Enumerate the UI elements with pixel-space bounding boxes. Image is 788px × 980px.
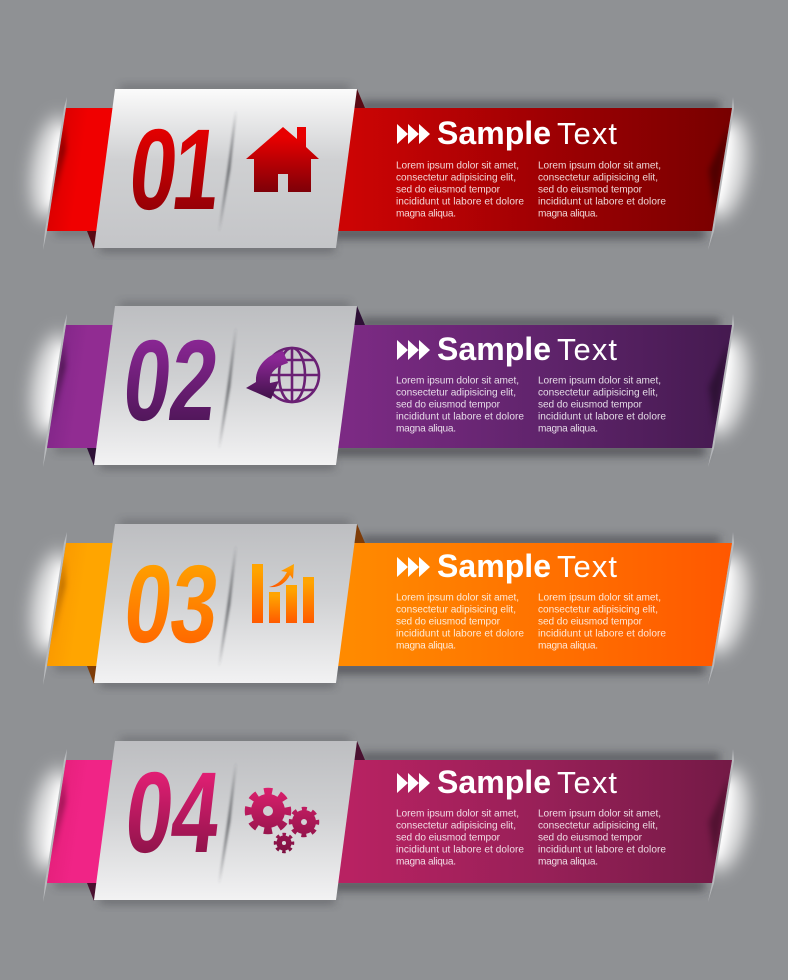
body text column 1: sed do eiusmod tempor (396, 832, 501, 844)
body text column 2: consectetur adipisicing elit, (538, 820, 658, 832)
body text column 1: consectetur adipisicing elit, (396, 820, 516, 832)
ribbon and card base 02 (25, 302, 754, 469)
number 04: 4 (165, 748, 226, 877)
body text column 2: consectetur adipisicing elit, (538, 172, 658, 184)
ribbon and card base 03 (25, 520, 754, 687)
title 02: Sample (437, 331, 551, 367)
body text column 1: Lorem ipsum dolor sit amet, (396, 376, 519, 386)
body text column 1: magna aliqua. (396, 208, 456, 220)
body text column 2: sed do eiusmod tempor (538, 184, 643, 196)
body text column 1 (396, 376, 524, 434)
body text column 2: consectetur adipisicing elit, (538, 388, 658, 398)
number 04 (119, 748, 226, 877)
body text column 1: magna aliqua. (396, 424, 456, 434)
number 02 (117, 316, 224, 445)
ribbon and card base 04 (25, 737, 754, 904)
body text column 1: Lorem ipsum dolor sit amet, (396, 592, 519, 604)
body text column 1: incididunt ut labore et dolore (396, 628, 524, 640)
title 04 (397, 764, 617, 800)
banner 01 (25, 85, 754, 252)
icon: bar chart with arrow (252, 564, 314, 623)
body text column 2: Lorem ipsum dolor sit amet, (538, 376, 661, 386)
body text column 2: consectetur adipisicing elit, (538, 604, 658, 616)
body text column 1: sed do eiusmod tempor (396, 184, 501, 196)
body text column 2 (538, 592, 666, 652)
body text column 2: magna aliqua. (538, 208, 598, 220)
body text column 2: Lorem ipsum dolor sit amet, (538, 592, 661, 604)
banner 04 (25, 737, 754, 904)
body text column 2: sed do eiusmod tempor (538, 400, 643, 410)
number 01 (123, 105, 227, 234)
title 03: Text (557, 549, 617, 584)
title 02 (397, 331, 617, 367)
number 01: 1 (166, 105, 227, 234)
body text column 2: magna aliqua. (538, 424, 598, 434)
banner 03 (25, 520, 754, 687)
body text column 1: consectetur adipisicing elit, (396, 388, 516, 398)
icon: globe with arrow (246, 348, 319, 402)
body text column 1: Lorem ipsum dolor sit amet, (396, 160, 519, 172)
body text column 1: magna aliqua. (396, 640, 456, 652)
body text column 2: magna aliqua. (538, 856, 598, 868)
body text column 1 (396, 592, 524, 652)
body text column 1 (396, 808, 524, 868)
number 03: 3 (164, 542, 225, 666)
body text column 1: incididunt ut labore et dolore (396, 196, 524, 208)
body text column 1: Lorem ipsum dolor sit amet, (396, 808, 519, 820)
title 03: Sample (437, 548, 551, 584)
body text column 2: Lorem ipsum dolor sit amet, (538, 160, 661, 172)
body text column 2: magna aliqua. (538, 640, 598, 652)
body text column 1: incididunt ut labore et dolore (396, 844, 524, 856)
body text column 2: sed do eiusmod tempor (538, 616, 643, 628)
body text column 1: magna aliqua. (396, 856, 456, 868)
number 03 (118, 542, 225, 666)
title 02: Text (557, 332, 617, 367)
body text column 2: sed do eiusmod tempor (538, 832, 643, 844)
body text column 2: incididunt ut labore et dolore (538, 196, 666, 208)
body text column 2: incididunt ut labore et dolore (538, 412, 666, 422)
title 01 (397, 115, 617, 151)
title 03 (397, 548, 617, 584)
body text column 2: incididunt ut labore et dolore (538, 844, 666, 856)
number 03: 0 (118, 542, 179, 666)
body text column 1: incididunt ut labore et dolore (396, 412, 524, 422)
infographic canvas (21, 82, 758, 908)
title 04: Sample (437, 764, 551, 800)
icon: house (246, 127, 319, 192)
ribbon and card base 01 (25, 85, 754, 252)
body text column 2 (538, 808, 666, 868)
body text column 1: sed do eiusmod tempor (396, 400, 501, 410)
banner 02 (25, 302, 754, 469)
body text column 1: sed do eiusmod tempor (396, 616, 501, 628)
body text column 1: consectetur adipisicing elit, (396, 604, 516, 616)
body text column 2 (538, 160, 666, 220)
number 02: 0 (117, 316, 178, 445)
body text column 2: incididunt ut labore et dolore (538, 628, 666, 640)
title 01: Sample (437, 115, 551, 151)
body text column 2: Lorem ipsum dolor sit amet, (538, 808, 661, 820)
title 04: Text (557, 765, 617, 800)
body text column 1: consectetur adipisicing elit, (396, 172, 516, 184)
body text column 2 (538, 376, 666, 434)
number 04: 0 (119, 748, 180, 877)
icon: gears (248, 792, 317, 852)
title 01: Text (557, 116, 617, 151)
body text column 1 (396, 160, 524, 220)
number 01: 0 (123, 105, 184, 234)
number 02: 2 (163, 316, 224, 445)
